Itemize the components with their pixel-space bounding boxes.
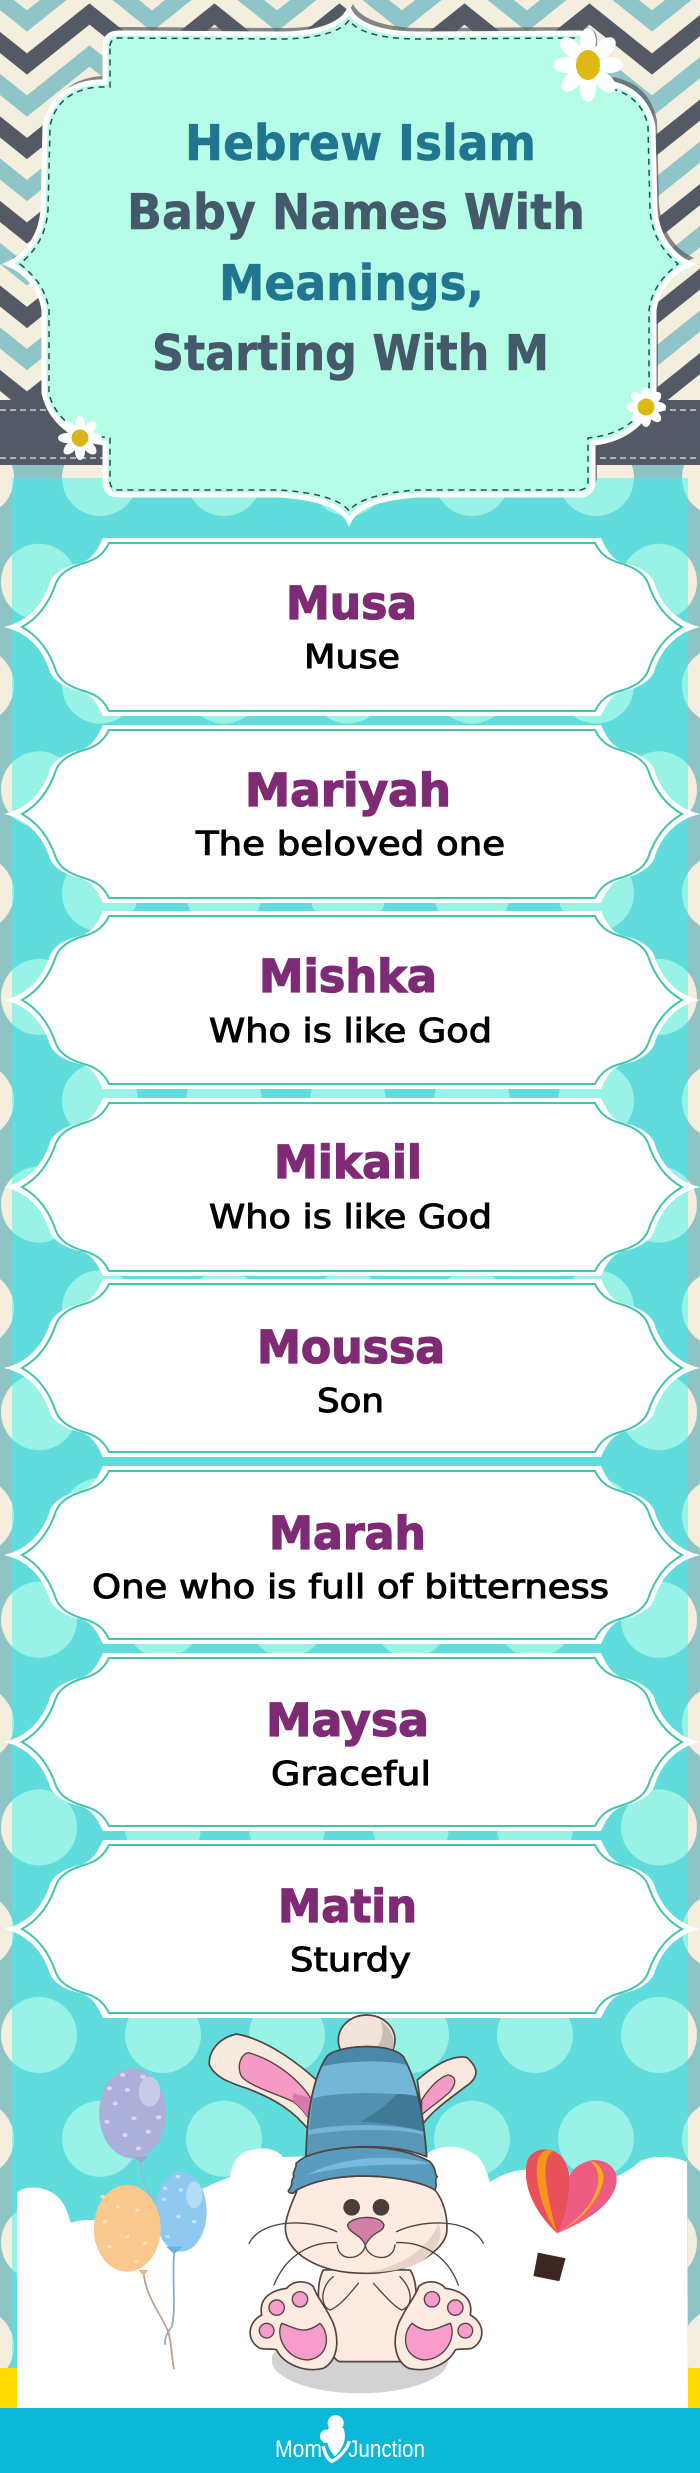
title text [127,115,585,382]
card: Mishka [4,911,700,1089]
left foot [250,2282,337,2370]
MomJunction logo: Junction [348,2436,425,2463]
MomJunction logo: Mom [275,2436,322,2463]
card: Mikail: Mikail [274,1136,422,1189]
hat brim [288,2147,437,2193]
icon: daisy top right [553,28,623,102]
bunny eyes [343,2199,389,2216]
title panel [8,4,694,521]
title text: Starting With M [152,325,549,382]
card: Matin [4,1840,700,2018]
card: Musa: Muse [304,637,400,676]
card: Mishka: Who is like God [209,1011,492,1050]
bunny ears [209,2034,476,2132]
card: Mariyah: Mariyah [245,764,451,817]
card: Marah: One who is full of bitterness [92,1567,609,1606]
card: Mikail: Who is like God [209,1197,492,1236]
bunny mouth and whiskers [249,2223,483,2285]
card: Maysa: Graceful [271,1754,431,1793]
right foot [395,2282,482,2370]
hat pom-pom [338,2015,395,2065]
card: Maysa [4,1653,700,1831]
icon: heart hot air balloon [526,2149,617,2233]
card: Moussa: Son [317,1381,384,1420]
card: Musa: Musa [286,577,417,630]
icon: balloon basket [533,2253,566,2281]
card: Mikail [4,1098,700,1276]
card: Marah: Marah [269,1507,426,1560]
MomJunction logo [275,2415,425,2463]
card: Moussa: Moussa [257,1321,445,1374]
bunny nose [348,2217,384,2245]
title text: Meanings, [219,255,484,312]
icon: daisy bottom right [626,387,666,427]
card: Maysa: Maysa [266,1694,429,1747]
icon: bunny with blue hat [209,2015,483,2393]
card: Mariyah: The beloved one [195,824,505,863]
card: Marah [4,1466,700,1644]
icon: daisy bottom left [58,416,102,460]
icon: mother and child with heart [320,2415,349,2461]
yellow corner strips [0,2368,700,2408]
icon: balloons [94,2068,207,2369]
card: Matin: Matin [278,1880,417,1933]
bunny head [285,2176,447,2273]
card: Mishka: Mishka [259,950,437,1003]
bunny body [318,2270,416,2362]
background: chevron banner [0,0,700,465]
white clouds [17,2147,688,2408]
hat [306,2047,427,2157]
title text: Hebrew Islam [185,115,536,172]
footer bar [0,2408,700,2473]
card: Moussa [4,1279,700,1457]
card: Musa [4,538,700,716]
card: Mariyah [4,725,700,903]
balloons and heart balloon [94,2068,617,2369]
bunny arms [323,2277,410,2310]
title text: Baby Names With [127,184,585,241]
card: Matin: Sturdy [290,1940,411,1979]
